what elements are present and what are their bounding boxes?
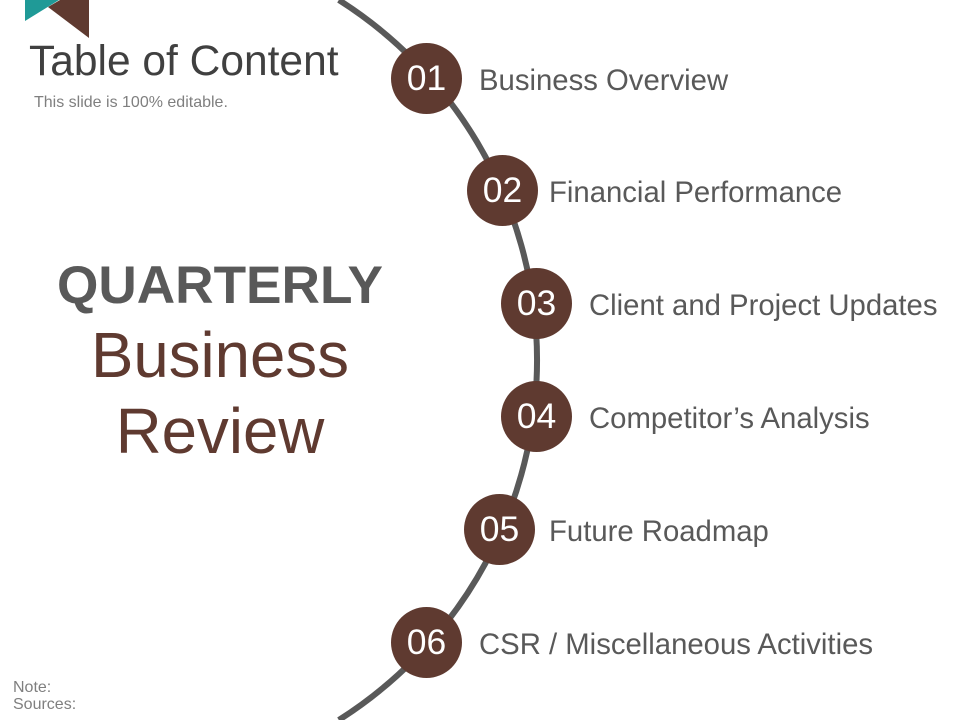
title: Table of Content [29,38,339,85]
item 01 [391,43,728,114]
item 02 [467,155,842,226]
number 06 [391,607,462,678]
heading: business review [91,320,349,467]
note and sources [13,679,76,713]
label 06: CSR / Miscellaneous Activities [479,628,873,661]
number 04 [501,381,572,452]
icon: ribbon corner [25,0,89,38]
center heading [57,256,383,467]
label 03: Client and Project Updates [589,289,938,322]
note and sources: Note: [13,679,51,696]
heading: quarterly: QUARTERLY [57,256,383,315]
number 06: 06 [407,622,446,662]
item 05 [464,494,769,565]
heading: business review: Business [91,320,349,391]
item 04 [501,381,870,452]
label 04: Competitor’s Analysis [589,402,870,435]
item 06 [391,607,873,678]
number 05: 05 [480,509,519,549]
number 04: 04 [517,396,556,436]
number 03 [501,268,572,339]
number 02: 02 [483,170,522,210]
heading: business review: Review [116,396,324,467]
number 01: 01 [407,58,446,98]
label 01: Business Overview [479,64,728,97]
item 03 [501,268,938,339]
label 05: Future Roadmap [549,515,769,548]
number 02 [467,155,538,226]
note and sources: Sources: [13,696,76,713]
label 02: Financial Performance [549,176,842,209]
number 03: 03 [517,283,556,323]
number 05 [464,494,535,565]
subtitle: This slide is 100% editable. [34,94,228,111]
number 01 [391,43,462,114]
